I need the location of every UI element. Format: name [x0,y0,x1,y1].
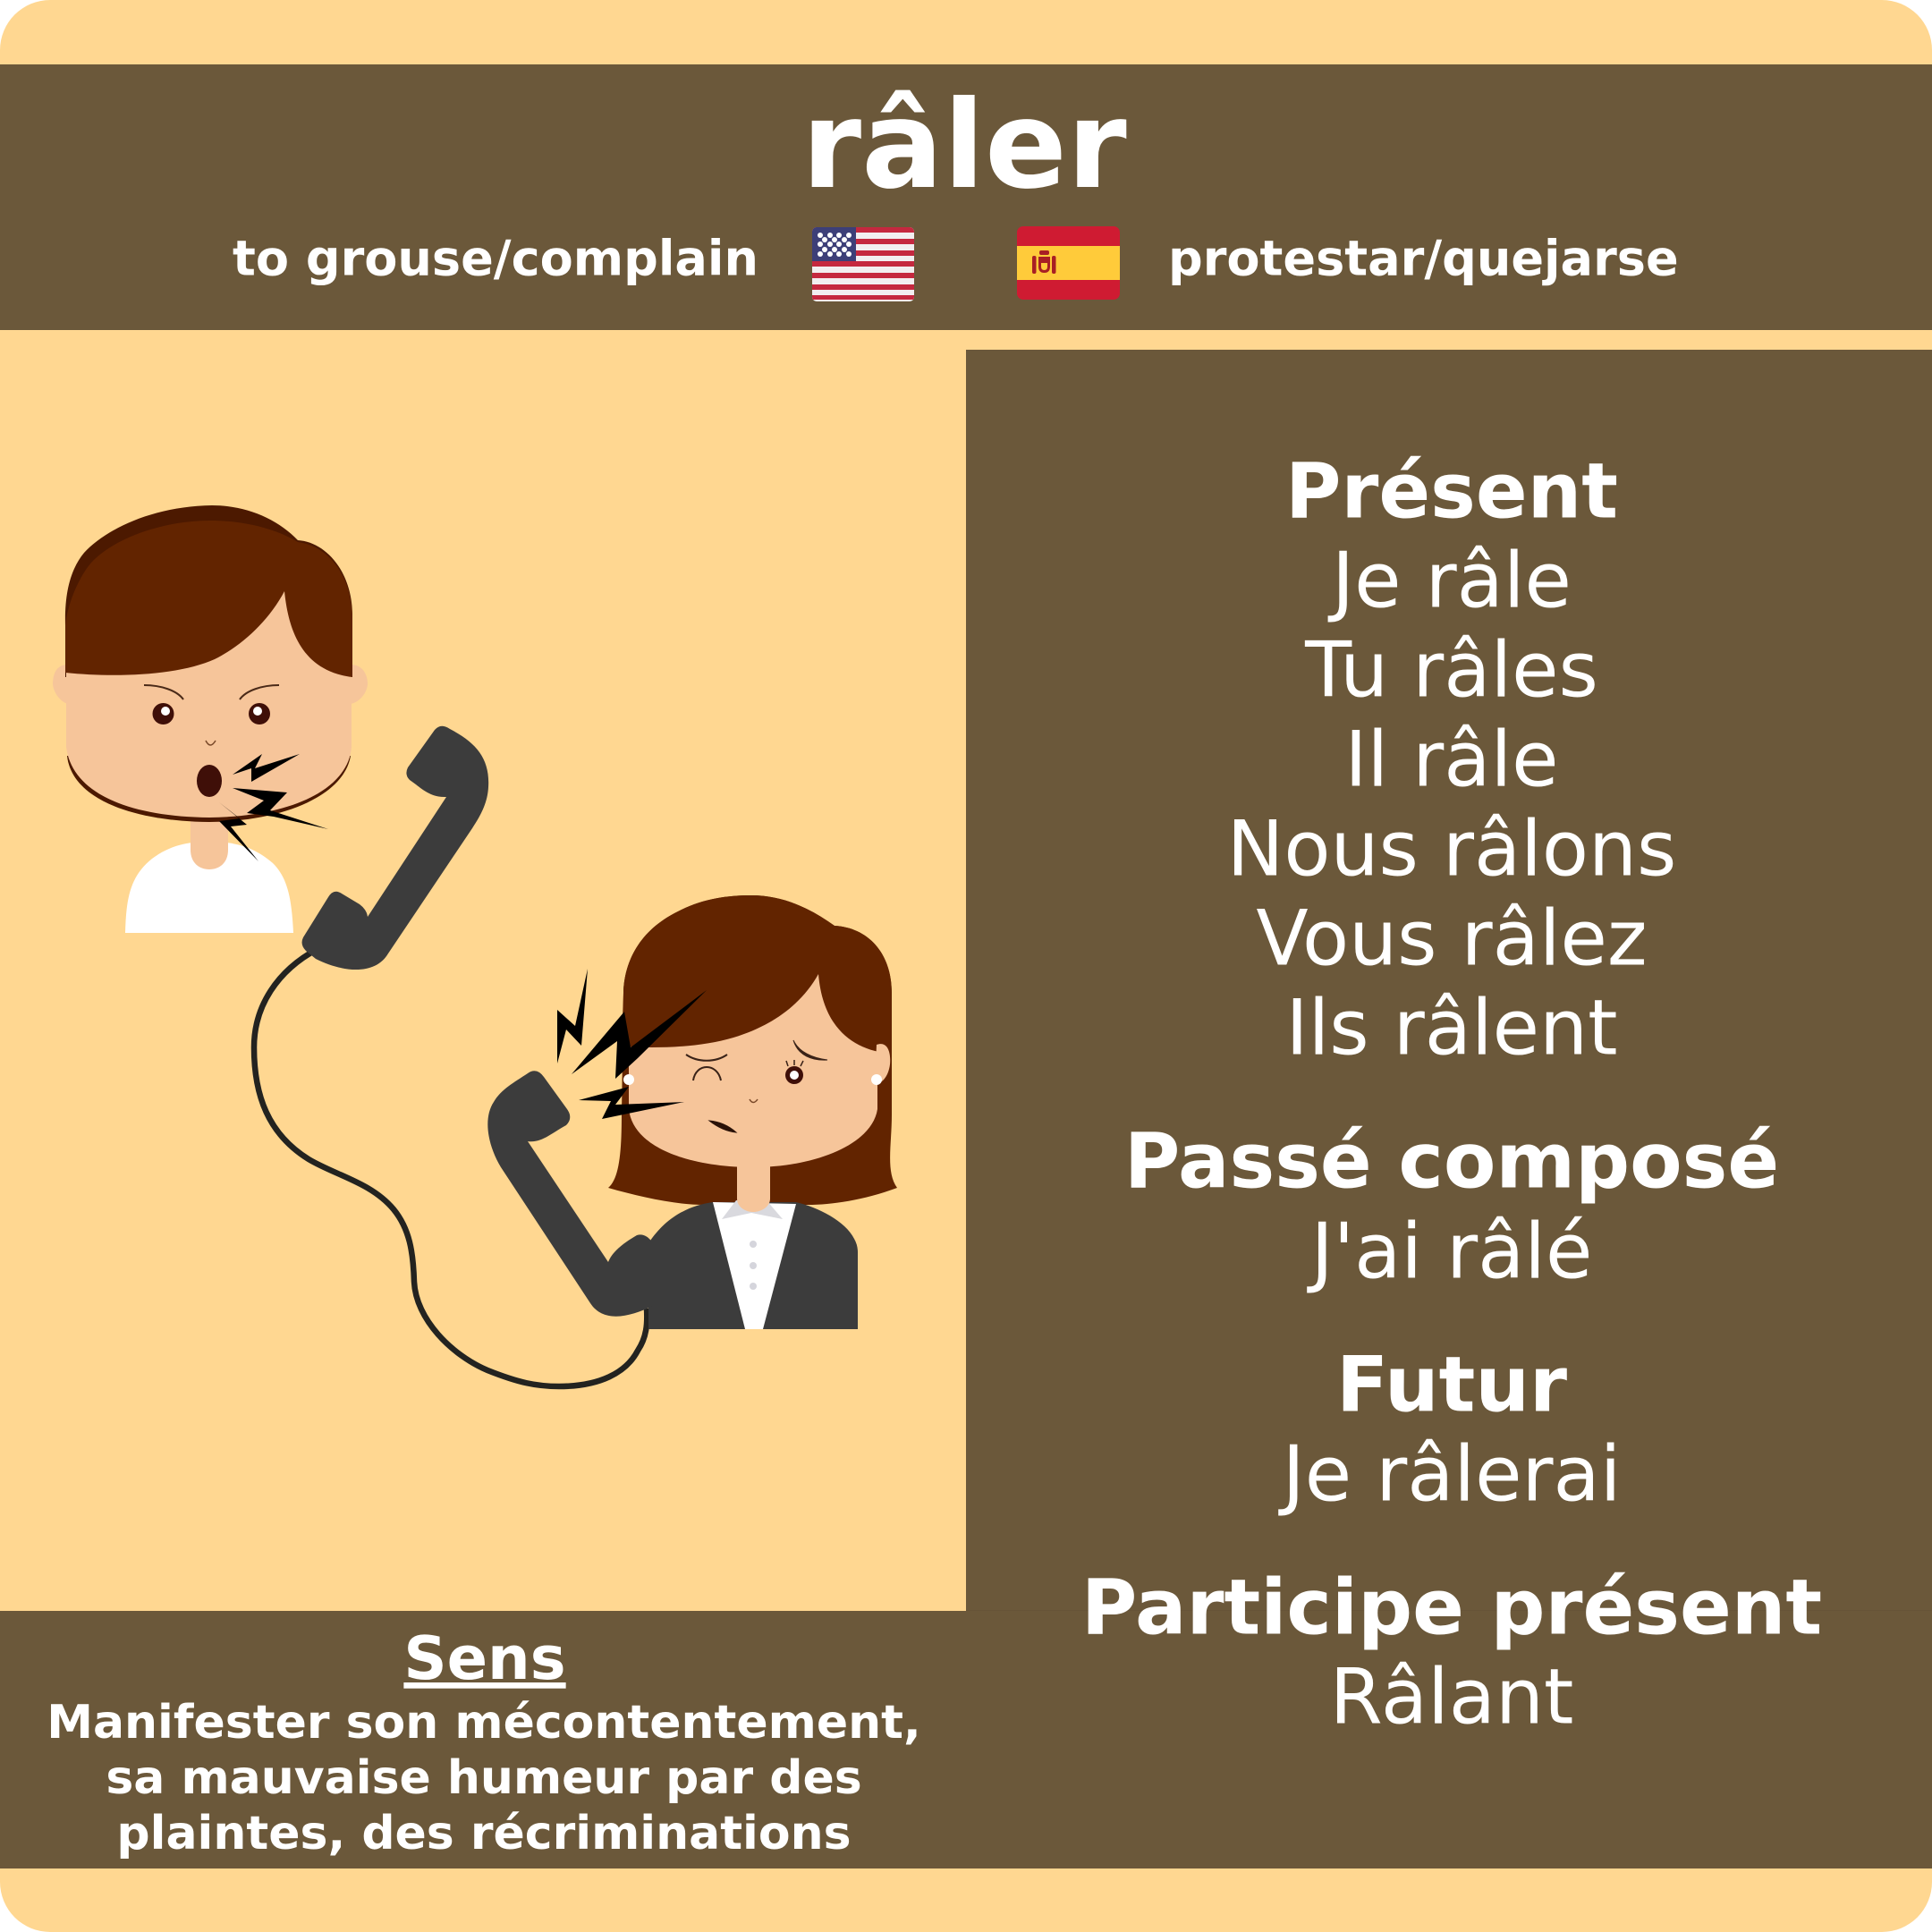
definition text: plaintes, des récriminations [116,1807,852,1860]
woman front hair [622,895,892,1054]
panel: meaning [0,1611,966,1868]
illustration: upper handset [302,726,488,970]
definition text [47,1696,921,1860]
present tense [1227,447,1676,1073]
woman neck [737,1163,770,1212]
participe présent: Râlant [1330,1653,1573,1742]
woman face [629,970,877,1167]
woman nose [750,1099,758,1102]
man front hair [65,521,352,677]
futur [1278,1342,1621,1519]
icon: US flag [812,227,914,301]
Spanish translation: protestar/quejarse [1168,231,1679,286]
man shirt [125,842,293,933]
present tense: Présent [1285,447,1618,537]
definition text: Manifester son mécontentement, [47,1696,921,1750]
illustration: man [53,505,368,933]
woman right ear [875,1044,890,1084]
woman shirt buttons [750,1241,757,1290]
present tense: Je râle [1327,537,1572,626]
heading: Sens: Sens [403,1623,566,1693]
man neck [191,814,228,869]
illustration: phone cord [254,949,647,1386]
man mouth [197,765,222,797]
woman jacket [648,1202,858,1329]
header band [0,64,1932,330]
panel: conjugations [966,350,1932,1868]
participe présent [1081,1563,1822,1742]
passé composé: J'ai râlé [1307,1208,1592,1297]
man face [66,581,352,818]
woman right eye [785,1060,803,1084]
title: râler [801,74,1127,216]
futur: Je râlerai [1278,1431,1621,1519]
woman collar [722,1200,783,1219]
woman shirt [713,1202,796,1329]
participe présent: Participe présent [1081,1563,1822,1653]
illustration: woman [557,895,897,1329]
woman right eyebrow [793,1040,827,1060]
passé composé [1124,1118,1779,1297]
futur: Futur [1336,1342,1567,1429]
illustration: lower handset [487,1071,653,1317]
woman ear bolts [557,969,707,1119]
man eyes [152,703,270,724]
definition text: sa mauvaise humeur par des [106,1751,862,1805]
woman earrings [623,1074,882,1085]
man nose [206,741,216,745]
present tense: Nous râlons [1227,805,1676,894]
woman mouth [709,1121,736,1132]
present tense: Tu râles [1304,626,1598,716]
English translation: to grouse/complain [233,231,758,286]
woman left eye closed [686,1055,727,1080]
passé composé: Passé composé [1124,1118,1779,1206]
present tense: Vous râlez [1256,894,1648,984]
present tense: Il râle [1344,716,1559,805]
woman hair [608,895,897,1205]
man ears [53,665,368,704]
man back hair and chin shadow [65,505,352,677]
present tense: Ils râlent [1286,984,1617,1073]
icon: Spanish flag [1017,226,1120,300]
man eyebrows [144,685,279,699]
man shout bolts [219,754,328,861]
